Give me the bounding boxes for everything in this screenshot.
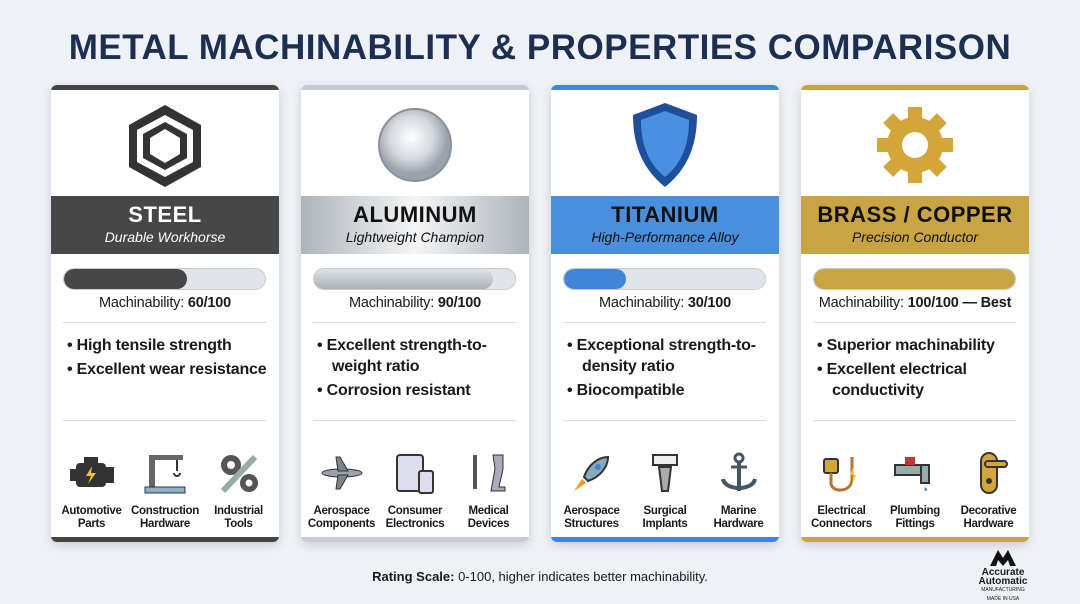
bullets: • Excellent wear resistance: [67, 361, 266, 378]
logo: [978, 550, 1028, 602]
bar: 60: [63, 268, 266, 290]
machinability text: Machinability: 30/100: [599, 295, 731, 311]
applications: Industrial Tools: [214, 505, 263, 530]
machinability text: Machinability: 100/100 — Best: [819, 295, 1011, 311]
bullets: • Biocompatible: [567, 382, 684, 399]
bullets: • Superior machinability: [817, 337, 995, 354]
title: METAL MACHINABILITY & PROPERTIES COMPARISON: [69, 28, 1011, 67]
applications: [811, 452, 1016, 530]
bar: 30: [563, 268, 766, 290]
header: titanium: TITANIUM: [611, 202, 719, 227]
applications: Plumbing Fittings: [890, 505, 940, 530]
bullets: [817, 337, 995, 399]
applications: [563, 452, 764, 530]
panel: brass: [801, 85, 1029, 542]
header: brass: Precision Conductor: [852, 229, 978, 245]
header: aluminum: ALUMINUM: [353, 202, 477, 227]
machinability text: Machinability: 90/100: [349, 295, 481, 311]
bar: 100: [813, 268, 1016, 290]
icon: gear: [877, 107, 953, 183]
logo: Automatic: [979, 576, 1027, 587]
applications: Electrical Connectors: [811, 505, 872, 530]
header: titanium: [551, 196, 779, 254]
machinability text: Machinability: 60/100: [99, 295, 231, 311]
applications: [61, 455, 263, 530]
header: steel: [51, 196, 279, 254]
applications: Aerospace Components: [308, 505, 375, 530]
panel: aluminum: [301, 85, 529, 542]
header: steel: Durable Workhorse: [105, 229, 225, 245]
icon: hexagon: [129, 105, 201, 187]
bullets: • Corrosion resistant: [317, 382, 470, 399]
logo: MANUFACTURING: [981, 587, 1025, 593]
header: aluminum: Lightweight Champion: [346, 229, 484, 245]
applications: Marine Hardware: [713, 505, 764, 530]
panel: titanium: [551, 85, 779, 542]
icon: shield: [633, 103, 697, 187]
icon: disc: [378, 108, 452, 182]
panel: steel: [51, 85, 279, 542]
header: aluminum: [301, 196, 529, 254]
bullets: [317, 337, 487, 399]
header: titanium: High-Performance Alloy: [591, 229, 739, 245]
bullets: [67, 337, 266, 378]
header: brass: [801, 196, 1029, 254]
bullets: • Exceptional strength-to-density ratio: [567, 337, 756, 375]
header: steel: STEEL: [128, 202, 202, 227]
logo: MADE IN USA: [987, 596, 1019, 602]
bullets: [567, 337, 756, 399]
applications: Medical Devices: [468, 505, 509, 530]
applications: Decorative Hardware: [961, 505, 1016, 530]
applications: Consumer Electronics: [386, 505, 444, 530]
logo: Accurate: [982, 567, 1024, 578]
applications: Construction Hardware: [131, 505, 199, 530]
bullets: • Excellent electrical conductivity: [817, 361, 967, 399]
header: brass: BRASS / COPPER: [817, 202, 1013, 227]
applications: [308, 454, 509, 530]
applications: Automotive Parts: [61, 505, 122, 530]
bullets: • High tensile strength: [67, 337, 232, 354]
footer note: Rating Scale: 0-100, higher indicates better machinability.: [372, 569, 708, 584]
applications: Aerospace Structures: [563, 505, 620, 530]
applications: Surgical Implants: [643, 505, 687, 530]
bullets: • Excellent strength-to-weight ratio: [317, 337, 487, 375]
bar: 90: [313, 268, 516, 290]
